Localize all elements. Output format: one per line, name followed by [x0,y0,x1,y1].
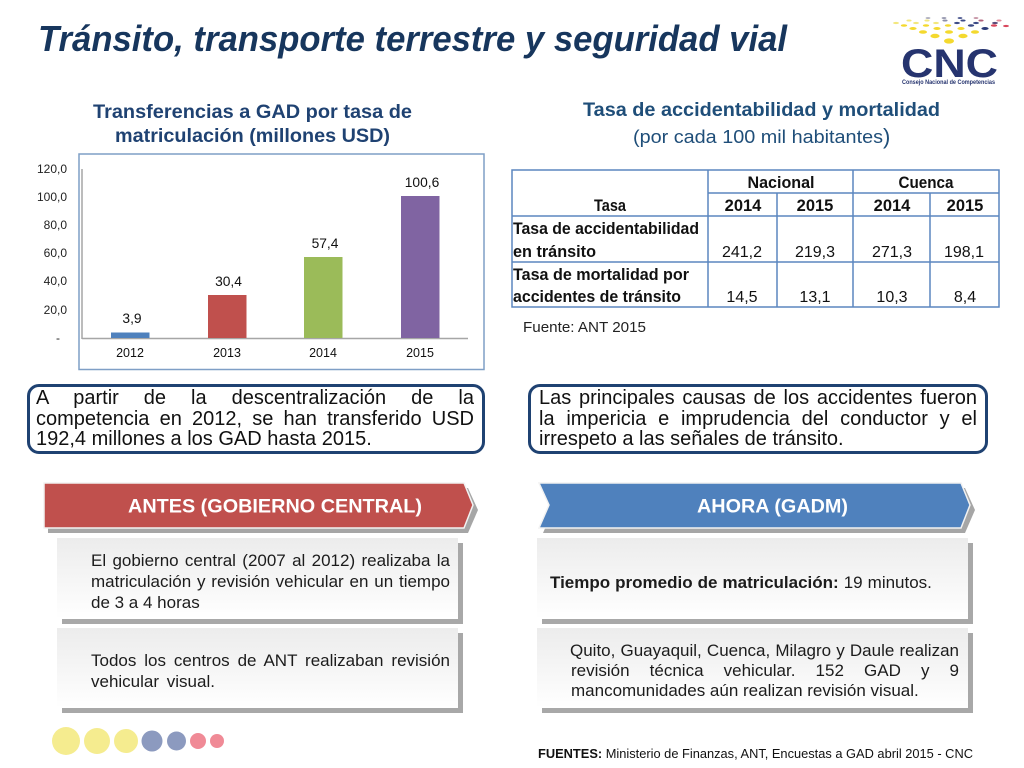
y axis labels [37,162,67,345]
card: ahora 1 [537,538,968,619]
y axis labels: 20,0 [44,303,67,317]
y axis labels: 80,0 [44,218,67,232]
table values: 14,5 [726,289,758,306]
card: antes 1: El gobierno central (2007 al 2012) realizaba la [91,551,450,570]
bar chart [37,154,484,370]
title: Tránsito, transporte terrestre y seguridad vial [38,18,788,59]
table values: 271,3 [872,244,912,261]
table header [594,174,983,215]
table header: 2015 [797,197,833,215]
card: antes 1 [57,538,458,619]
banner: antes: ANTES (GOBIERNO CENTRAL) [128,496,422,518]
banner: antes [44,483,478,533]
decorative dots [52,727,224,755]
x axis labels: 2012 [116,346,144,360]
table [512,170,999,307]
heading: tasa de accidentabilidad [583,100,940,149]
heading: tasa de accidentabilidad: (por cada 100 mil habitantes [633,126,883,147]
card: antes 2: vehicular visual. [91,672,215,691]
banner: ahora: AHORA (GADM) [697,496,848,518]
table values: 8,4 [954,289,976,306]
table header: 2014 [725,197,762,215]
logo: CNC: Consejo Nacional de Competencias [902,79,995,86]
heading: tasa de accidentabilidad: ) [883,124,890,149]
card: antes 2 [57,628,458,708]
table values [722,244,984,306]
heading: transferencias [93,102,412,147]
callout: transferencias [27,384,485,454]
card: antes 1: de 3 a 4 horas [91,593,200,612]
heading: transferencias: matriculación (millones USD) [115,126,390,147]
card: ahora 2: mancomunidades aún realizan revisión visual. [571,681,919,700]
value labels: 30,4 [215,274,242,289]
value labels [122,175,440,326]
table header: Cuenca [898,174,954,192]
y axis labels: 100,0 [37,190,67,204]
heading: transferencias: Transferencias a GAD por tasa de [93,102,412,123]
footer sources: FUENTES: Ministerio de Finanzas, ANT, Encuestas a GAD abril 2015 - CNC [538,746,973,761]
callout: causas [528,384,988,454]
logo: CNC: CNC [901,42,998,86]
value labels: 3,9 [122,311,142,326]
table values: 198,1 [944,244,984,261]
y axis labels: 60,0 [44,246,67,260]
banner: ahora [539,483,975,533]
table header: 2014 [874,197,911,215]
table values: 10,3 [876,289,908,306]
row labels: Tasa de mortalidad por [513,266,690,284]
table header: Nacional [748,174,814,192]
card: antes 2: Todos los centros de ANT realizaban revisión [91,651,450,670]
row labels: Tasa de accidentabilidad [513,220,699,238]
card: ahora 2: Quito, Guayaquil, Cuenca, Milagro y Daule realizan [570,641,959,660]
table values: 219,3 [795,244,835,261]
card: ahora 2 [537,628,968,708]
row labels: en tránsito [513,243,596,261]
bars [111,196,440,338]
card: antes 1: matriculación y revisión vehicular en un tiempo [91,572,450,591]
table values: 13,1 [799,289,831,306]
source note: Fuente: ANT 2015 [523,319,646,336]
table values: 241,2 [722,244,762,261]
value labels: 100,6 [405,175,440,190]
card: ahora 2: revisión técnica vehicular. 152 GAD y 9 [571,661,959,680]
y axis labels: 40,0 [44,274,67,288]
logo: CNC [893,17,1009,86]
heading: tasa de accidentabilidad: Tasa de accidentabilidad y mortalidad [583,100,940,121]
table header: Tasa [594,197,627,215]
row labels: accidentes de tránsito [513,288,681,306]
table header: 2015 [947,197,983,215]
x axis labels: 2015 [406,346,434,360]
card: ahora 1: Tiempo promedio de matriculación: 19 minutos. [550,573,932,592]
row labels [513,220,699,306]
y axis labels: 120,0 [37,162,67,176]
value labels: 57,4 [312,236,339,251]
x axis labels: 2014 [309,346,337,360]
x axis labels [116,346,434,360]
y axis labels: - [56,331,60,345]
x axis labels: 2013 [213,346,241,360]
